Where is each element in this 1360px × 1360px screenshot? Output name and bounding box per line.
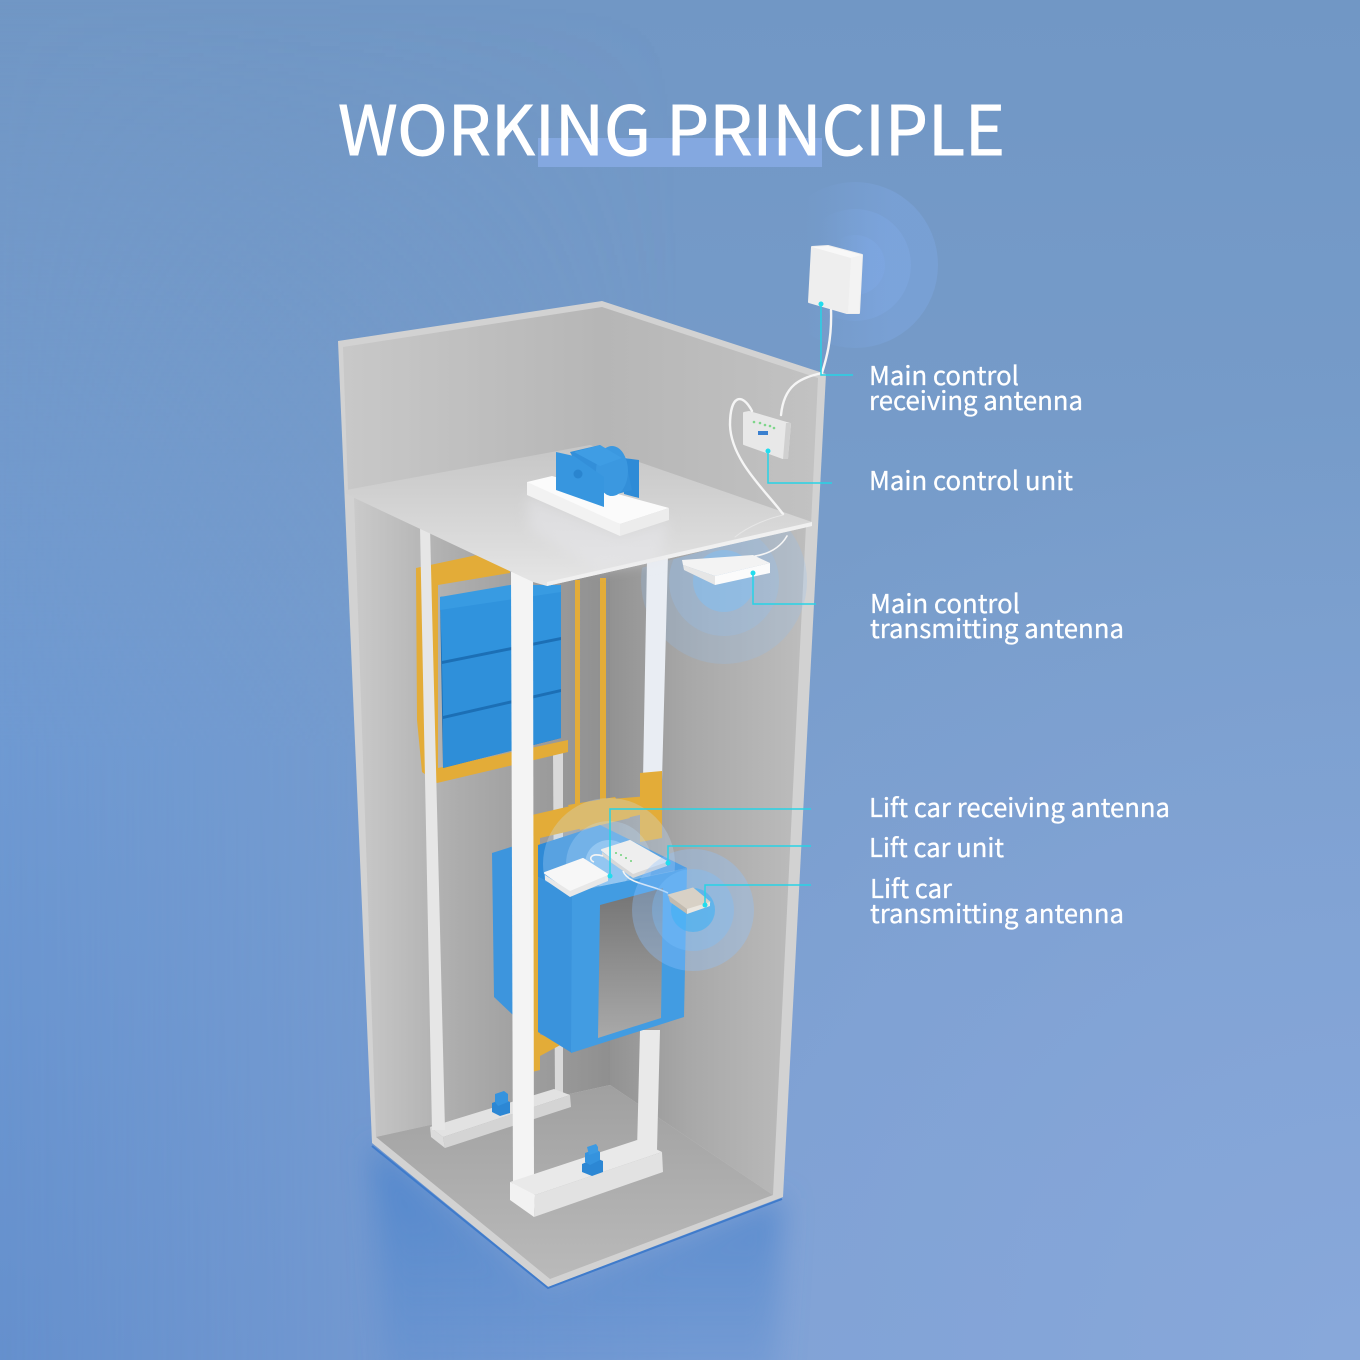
- main control unit: [744, 412, 791, 459]
- icon: receiving antenna waves: [772, 182, 938, 348]
- back buffer: [492, 1091, 510, 1116]
- antenna cables: [730, 310, 831, 556]
- cables on lift car: [591, 855, 668, 893]
- rear right guide rail: [553, 750, 563, 1095]
- label: main control unit: Main control unit: [869, 461, 1073, 498]
- elevator shaft: [338, 301, 826, 1288]
- front buffer: [582, 1144, 603, 1176]
- motor rear plate: [624, 458, 639, 498]
- lift car rear body: [492, 840, 533, 1022]
- shaft outer silhouette: [338, 301, 826, 1287]
- label: lift car unit: Lift car unit: [869, 828, 1004, 865]
- lift car receiving antenna: [545, 859, 608, 897]
- door opening: [598, 888, 663, 1038]
- machine base reflection: [527, 495, 669, 570]
- traction machine: [527, 445, 669, 536]
- icon: lift car receiving waves: [543, 798, 675, 888]
- front left guide rail: [511, 572, 534, 1195]
- label: main control receiving antenna: receiving antenna: [869, 381, 1083, 418]
- floor reflection: [372, 1143, 783, 1360]
- car front face: [571, 868, 687, 1053]
- yellow suspension ropes: [575, 578, 606, 805]
- car left face: [538, 877, 572, 1053]
- machine base: [527, 476, 669, 524]
- label: main control transmitting antenna: [870, 584, 1124, 646]
- shaft left wall: [354, 497, 610, 1137]
- back buffer base: [430, 1089, 571, 1148]
- motor front plate: [556, 452, 604, 507]
- label: main control receiving antenna: Main control: [869, 356, 1019, 393]
- lift car transmitting antenna: [668, 888, 710, 914]
- front right guide rail: [637, 555, 668, 1150]
- blue weight blocks: [440, 585, 561, 661]
- label: lift car receiving antenna: Lift car receiving antenna: [869, 788, 1170, 825]
- receiving antenna panel: [809, 246, 862, 313]
- motor cylinder: [570, 445, 632, 496]
- label: lift car transmitting antenna: Lift car: [870, 869, 953, 906]
- main control transmitting antenna: [682, 555, 770, 585]
- upper left wall: [343, 307, 602, 490]
- lift car: [538, 825, 687, 1053]
- title: WORKING PRINCIPLE: [338, 76, 1005, 175]
- leader lines: [608, 302, 853, 908]
- weight top highlight: [440, 585, 561, 610]
- upper right wall: [602, 307, 818, 525]
- background: [0, 588, 1360, 1360]
- label: main control transmitting antenna: Main control: [870, 584, 1020, 621]
- pit floor: [376, 1085, 773, 1279]
- machine room slab: [346, 445, 812, 586]
- shaft right wall: [610, 525, 806, 1195]
- counterweight: [416, 555, 568, 783]
- front buffer base: [510, 1140, 663, 1217]
- car top: [538, 825, 687, 892]
- label: main control receiving antenna: [869, 356, 1083, 418]
- label: lift car transmitting antenna: [870, 869, 1124, 931]
- rear left guide rail: [420, 527, 445, 1130]
- lift car unit: [602, 841, 667, 878]
- bottom edge shadow: [372, 1146, 782, 1288]
- icon: main control transmitting waves: [641, 531, 807, 664]
- gap behind weights: [440, 585, 561, 768]
- yellow frame: [416, 555, 568, 783]
- icon: lift car transmitting waves: [632, 849, 754, 971]
- lift car frame: [532, 771, 662, 1072]
- label: main control transmitting antenna: transmitting antenna: [870, 609, 1124, 646]
- label: lift car transmitting antenna: transmitting antenna: [870, 894, 1124, 931]
